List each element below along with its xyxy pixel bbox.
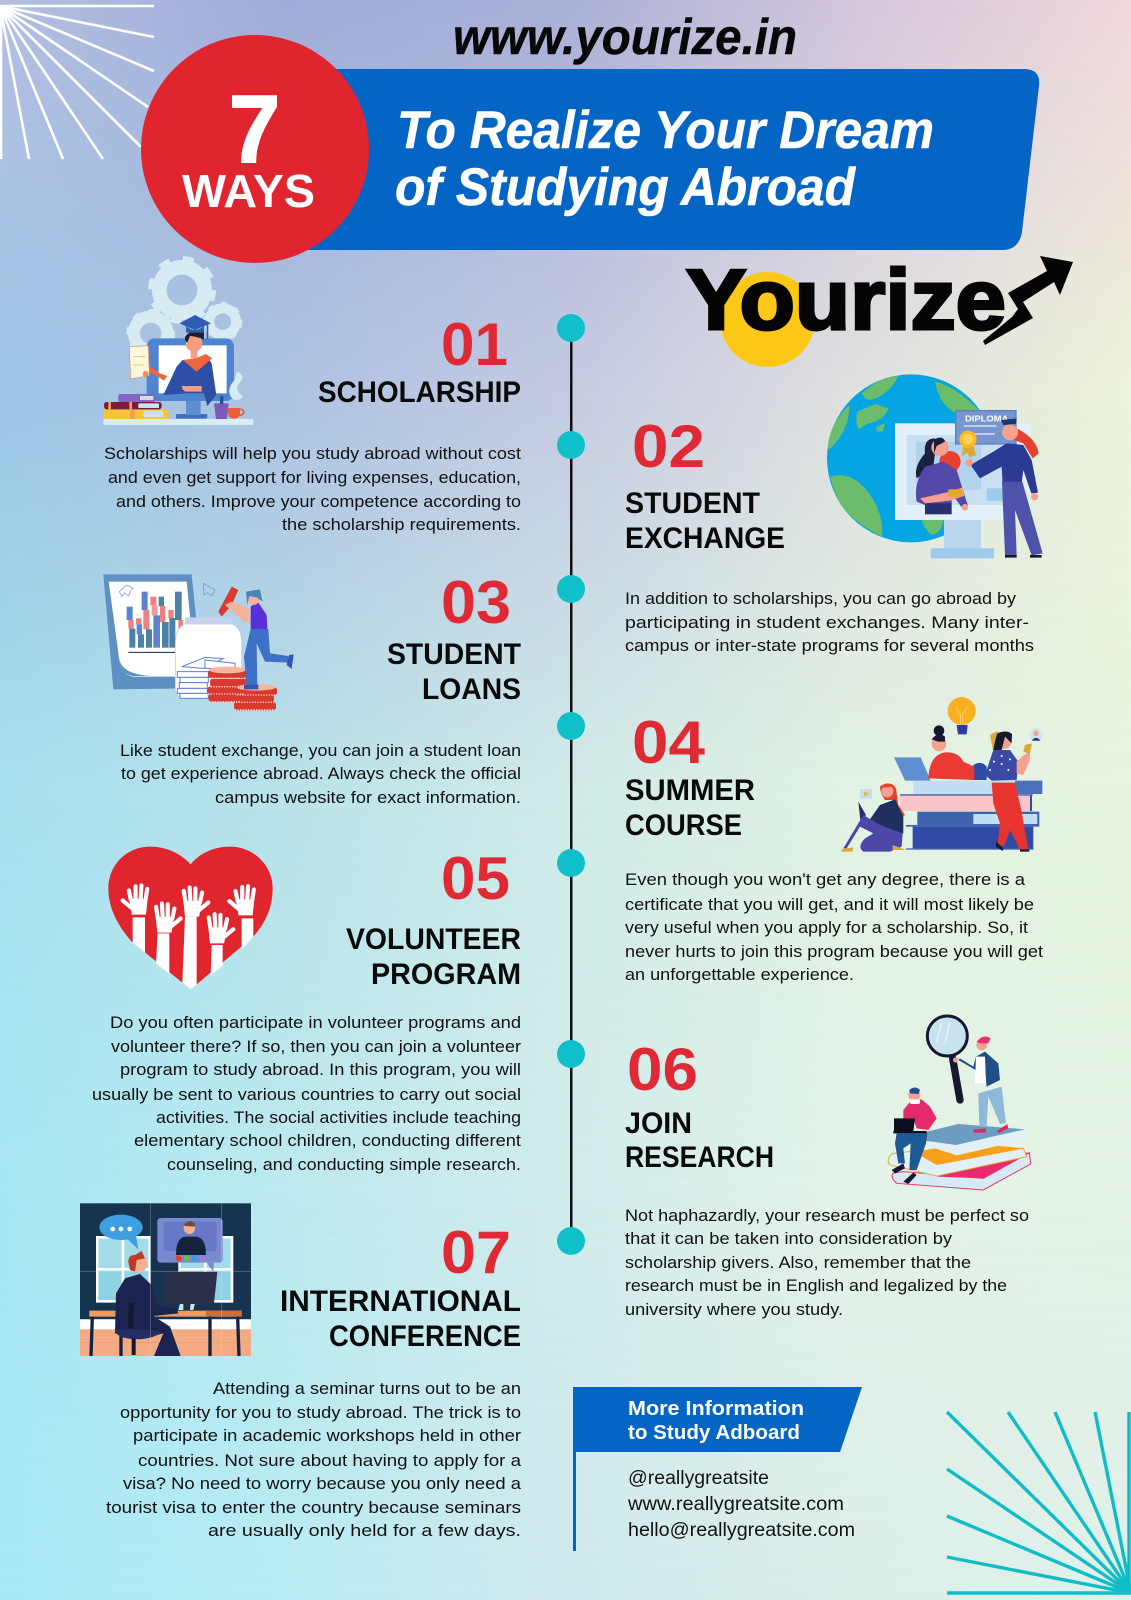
number 07: 07 — [441, 1219, 511, 1286]
icon: globe and diploma: DIPLOMA — [965, 414, 1008, 424]
text: student exchange: In addition to scholarships, you can go abroad by — [625, 589, 1017, 608]
text: volunteer program: activities. The social activities include teaching — [156, 1108, 521, 1127]
icon: globe and diploma — [827, 374, 1043, 558]
text: student exchange: participating in student exchanges. Many inter- — [625, 613, 1029, 632]
timeline — [557, 314, 585, 1255]
decorative rays top left — [0, 6, 154, 159]
contact details: hello@reallygreatsite.com — [628, 1520, 855, 1541]
heading: volunteer program: VOLUNTEER — [346, 923, 521, 956]
flag and pole — [573, 1387, 862, 1551]
text: volunteer program: elementary school children, conducting different — [134, 1131, 521, 1150]
number 02: 02 — [632, 413, 705, 480]
text: volunteer program: counseling, and conducting simple research. — [167, 1155, 521, 1174]
contact details: @reallygreatsite — [628, 1468, 769, 1489]
red circle badge: WAYS — [182, 165, 315, 217]
heading: student loans: LOANS — [422, 673, 521, 706]
text: international conference: Attending a seminar turns out to be an — [213, 1379, 521, 1398]
text: join research: that it can be taken into consideration by — [625, 1229, 953, 1248]
number 06: 06 — [627, 1036, 698, 1103]
Yourize logo — [686, 253, 1073, 367]
decorative rays bottom right — [947, 1412, 1131, 1593]
header banner — [300, 69, 1039, 250]
text: join research: university where you study. — [625, 1300, 843, 1319]
flag heading: More Information — [628, 1398, 804, 1420]
text: student loans: campus website for exact information. — [215, 788, 521, 807]
heading: summer course: SUMMER — [625, 774, 755, 807]
heading: student exchange — [625, 487, 785, 555]
flag heading: to Study Adboard — [628, 1422, 800, 1444]
heading: student exchange: STUDENT — [625, 487, 760, 520]
text: student loans: Like student exchange, you can join a student loan — [120, 741, 521, 760]
text: join research: research must be in English and legalized by the — [625, 1276, 1007, 1295]
red circle badge — [141, 35, 369, 263]
text: scholarship: and others. Improve your competence according to — [116, 492, 521, 511]
text: summer course: Even though you won't get any degree, there is a — [625, 870, 1026, 889]
text: student loans: to get experience abroad. Always check the official — [121, 764, 521, 783]
text: volunteer program — [92, 1013, 521, 1174]
heading: volunteer program — [346, 923, 521, 991]
text: international conference: tourist visa to enter the country because seminars — [106, 1498, 521, 1517]
text: international conference: opportunity for you to study abroad. The trick is to — [120, 1403, 521, 1422]
text: volunteer program: volunteer there? If so, then you can join a volunteer — [111, 1037, 521, 1056]
text: international conference: are usually only held for a few days. — [208, 1521, 521, 1540]
icon: heart with raised hands — [108, 847, 273, 989]
heading: join research: JOIN — [625, 1107, 692, 1140]
heading: student loans: STUDENT — [387, 638, 521, 671]
text: join research: Not haphazardly, your research must be perfect so — [625, 1206, 1029, 1225]
text: student exchange — [625, 589, 1034, 655]
banner shape — [300, 69, 1039, 250]
heading: student exchange: EXCHANGE — [625, 522, 785, 555]
number 04: 04 — [632, 709, 706, 776]
icon: chart, jar and coins — [103, 574, 294, 710]
text: summer course: an unforgettable experience. — [625, 965, 854, 984]
icon: graduate on monitor — [103, 260, 253, 425]
heading: summer course: COURSE — [625, 809, 742, 842]
red circle badge: 7 — [229, 76, 280, 183]
Yourize logo: Yourize — [686, 253, 1006, 348]
icon: people on books — [842, 697, 1043, 852]
text: summer course: never hurts to join this program because you will get — [625, 942, 1043, 961]
panel: more information — [573, 1387, 862, 1551]
text: volunteer program: usually be sent to various countries to carry out social — [92, 1085, 521, 1104]
text: student loans — [120, 741, 521, 807]
contact details — [627, 1468, 855, 1541]
text: summer course: certificate that you will get, and it will most likely be — [625, 895, 1034, 914]
heading: join research — [625, 1107, 774, 1174]
contact details: www.reallygreatsite.com — [627, 1494, 844, 1515]
text: international conference: participate in academic workshops held in other — [133, 1426, 521, 1445]
heading: student loans — [387, 638, 521, 706]
icon: research with magnifier — [888, 1016, 1031, 1190]
flag heading — [628, 1398, 804, 1444]
text: join research: scholarship givers. Also, remember that the — [625, 1253, 971, 1272]
number 01: 01 — [441, 311, 508, 378]
number 03: 03 — [441, 569, 511, 636]
text: student exchange: campus or inter-state programs for several months — [625, 636, 1034, 655]
text: international conference — [106, 1379, 522, 1540]
heading: volunteer program: PROGRAM — [371, 958, 521, 991]
text: volunteer program: Do you often participate in volunteer programs and — [110, 1013, 521, 1032]
text: summer course: very useful when you apply for a scholarship. So, it — [625, 918, 1028, 937]
text: scholarship: and even get support for living expenses, education, — [108, 468, 521, 487]
banner title: of Studying Abroad — [395, 158, 857, 217]
text: join research — [625, 1206, 1029, 1319]
number 05: 05 — [441, 845, 510, 912]
heading: join research: RESEARCH — [625, 1141, 774, 1174]
heading: international conference: INTERNATIONAL — [280, 1285, 521, 1318]
heading: summer course — [625, 774, 755, 842]
icon: video conference — [80, 1203, 251, 1356]
text: scholarship — [104, 444, 521, 534]
banner title — [395, 101, 934, 217]
text: international conference: visa? No need to worry because you only need a — [123, 1474, 522, 1493]
website url: www.yourize.in — [453, 9, 797, 65]
banner title: To Realize Your Dream — [397, 101, 934, 160]
text: volunteer program: program to study abroad. In this program, you will — [120, 1060, 521, 1079]
heading: scholarship: SCHOLARSHIP — [318, 376, 521, 409]
text: scholarship: Scholarships will help you study abroad without cost — [104, 444, 521, 463]
text: summer course — [625, 870, 1043, 984]
text: scholarship: the scholarship requirements. — [282, 515, 521, 534]
heading: international conference — [280, 1285, 521, 1353]
heading: international conference: CONFERENCE — [329, 1320, 521, 1353]
text: international conference: countries. Not sure about having to apply for a — [138, 1451, 522, 1470]
